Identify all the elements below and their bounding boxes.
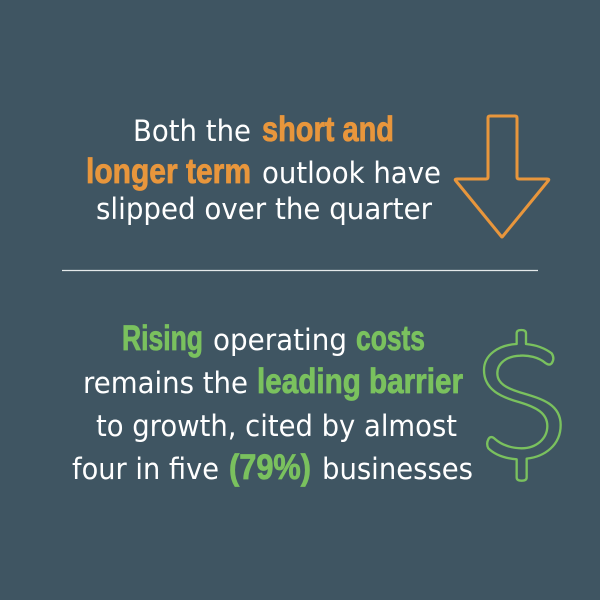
text block: outlook statement: slipped over the quarter — [96, 192, 433, 226]
text block: outlook statement: longer term — [86, 152, 251, 191]
text block: outlook statement: outlook have — [262, 156, 441, 190]
icon: down arrow — [455, 116, 549, 237]
divider line — [62, 270, 538, 272]
text block: leading barrier statement: businesses — [322, 452, 473, 486]
text block: leading barrier statement: (79%) — [229, 448, 311, 487]
text block: leading barrier statement — [72, 319, 473, 487]
text block: leading barrier statement: leading barrier — [257, 362, 463, 401]
text block: leading barrier statement: costs — [356, 319, 425, 358]
text block: outlook statement: Both the — [133, 114, 251, 148]
icon: dollar sign — [484, 330, 561, 481]
text block: leading barrier statement: Rising — [122, 319, 203, 358]
text block: leading barrier statement: remains the — [83, 366, 248, 400]
text block: leading barrier statement: operating — [213, 323, 347, 357]
text block: outlook statement: short and — [262, 110, 394, 149]
text block: leading barrier statement: four in five — [72, 452, 219, 486]
text block: outlook statement — [86, 110, 441, 226]
text block: leading barrier statement: to growth, cited by almost — [96, 409, 457, 443]
